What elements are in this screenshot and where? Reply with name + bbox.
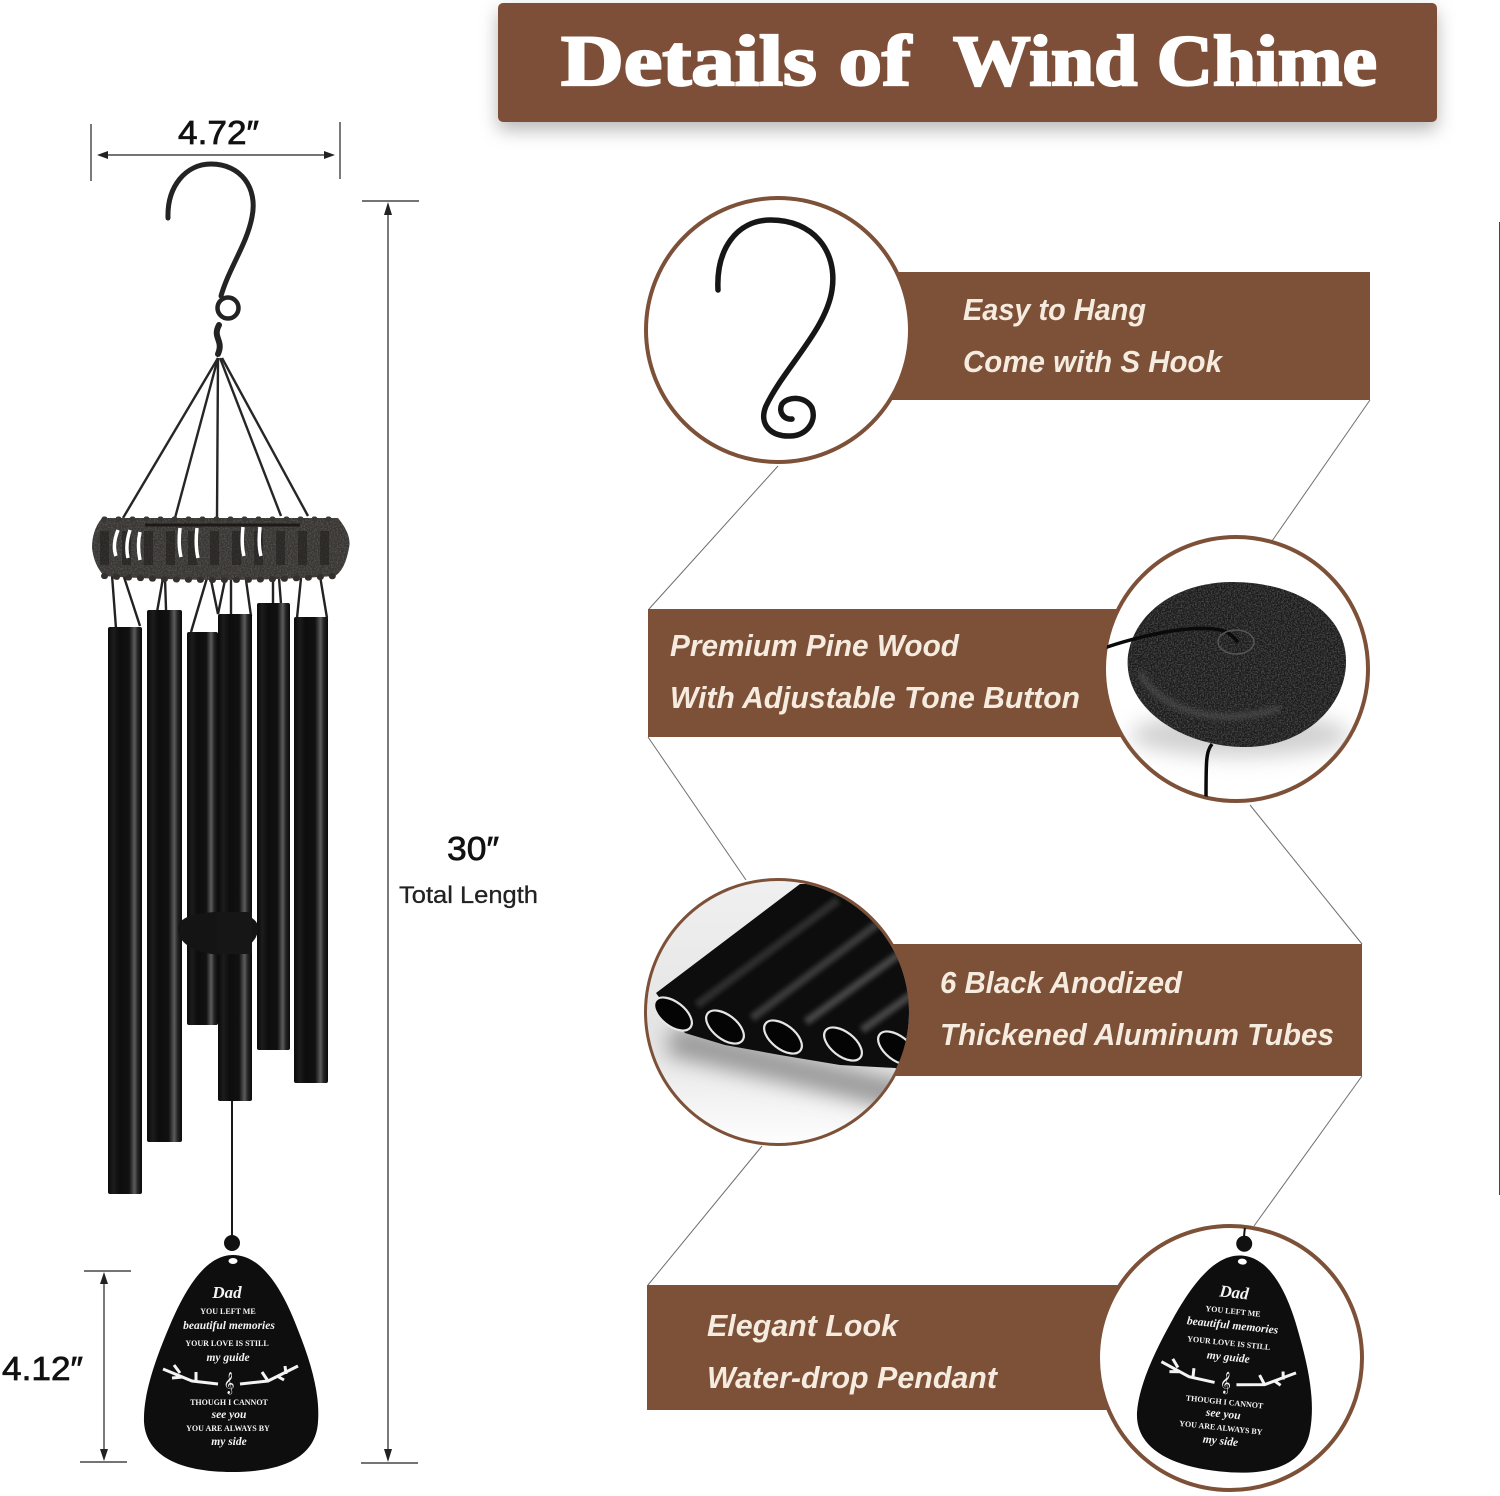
height dimension: 30 inches total length: 30″ [447,830,499,867]
height dimension: 30 inches total length [361,201,538,1463]
pendant with message: see you [211,1409,247,1421]
caption 1: Come with S Hook [963,344,1224,379]
banner 1 [880,272,1370,400]
caption 3: 6 Black Anodized [940,965,1183,1000]
wind chime product [92,164,350,1472]
circle 3 with tubes [644,878,909,1146]
pendant cord [231,1101,233,1245]
callout 4: pendant [647,1217,1362,1490]
callout 1: S hook [646,198,1370,462]
tube cords [112,575,327,655]
pendant with message: YOU ARE ALWAYS BY [186,1424,270,1433]
pendant with message [144,1235,318,1472]
circle 4 with pendant: YOUR LOVE IS STILL [1187,1334,1271,1352]
width dimension: 4.72 inches [91,114,340,181]
banner 4 [647,1285,1137,1410]
circle 4 with pendant: YOU ARE ALWAYS BY [1179,1419,1263,1437]
circle 4 with pendant: THOUGH I CANNOT [1185,1394,1264,1411]
pendant height dimension: 4.12 inches: 4.12″ [2,1350,83,1387]
caption 2: Premium Pine Wood [670,628,960,663]
six black tubes [108,603,328,1194]
circle 1 with hook [646,198,910,462]
pendant with message: beautiful memories [183,1320,275,1332]
caption 3: Thickened Aluminum Tubes [940,1017,1334,1052]
circle 2 with tone button [1104,537,1368,801]
caption 2: With Adjustable Tone Button [670,680,1080,715]
title banner [498,3,1437,122]
circle 4 with pendant: 𝄞 [1219,1371,1232,1395]
circle 4 with pendant: YOU LEFT ME [1205,1304,1261,1319]
height dimension: 30 inches total length: Total Length [399,882,538,909]
banner 3 [880,944,1362,1076]
caption 4: Water-drop Pendant [707,1360,999,1395]
title: Details of [561,21,912,101]
pendant with message: 𝄞 [223,1372,235,1395]
circle 4 with pendant: Dad [1218,1281,1250,1303]
pendant height dimension: 4.12 inches [2,1271,131,1462]
circle 4 with pendant: my guide [1206,1349,1250,1366]
pendant with message: my side [211,1436,247,1448]
callout 3: aluminum tubes [640,875,1362,1150]
caption 3 [940,965,1334,1052]
caption 1: Easy to Hang [963,292,1146,327]
wooden ring [92,518,350,580]
connector lines between callouts [648,222,1500,1285]
banner 2 [648,609,1138,737]
striker disc [178,912,258,955]
circle 4 with pendant: see you [1204,1407,1242,1422]
circle 4 with pendant: beautiful memories [1186,1315,1279,1337]
caption 1 [963,292,1224,379]
hanging S hook [168,164,253,354]
title banner: Wind Chime [953,21,1377,101]
pendant with message: YOU LEFT ME [200,1307,256,1316]
suspension cords [123,358,308,518]
caption 4 [707,1308,999,1395]
callout 2: pine wood [648,537,1368,801]
pendant with message: THOUGH I CANNOT [190,1398,269,1407]
circle 4 with pendant: my side [1202,1434,1239,1449]
width dimension: 4.72 inches: 4.72″ [178,114,259,151]
caption 4: Elegant Look [707,1308,900,1343]
circle 4 with pendant [1098,1217,1362,1490]
pendant with message: YOUR LOVE IS STILL [185,1339,269,1348]
pendant with message: my guide [206,1352,250,1364]
caption 2 [670,628,1080,715]
pendant with message: Dad [211,1283,242,1302]
